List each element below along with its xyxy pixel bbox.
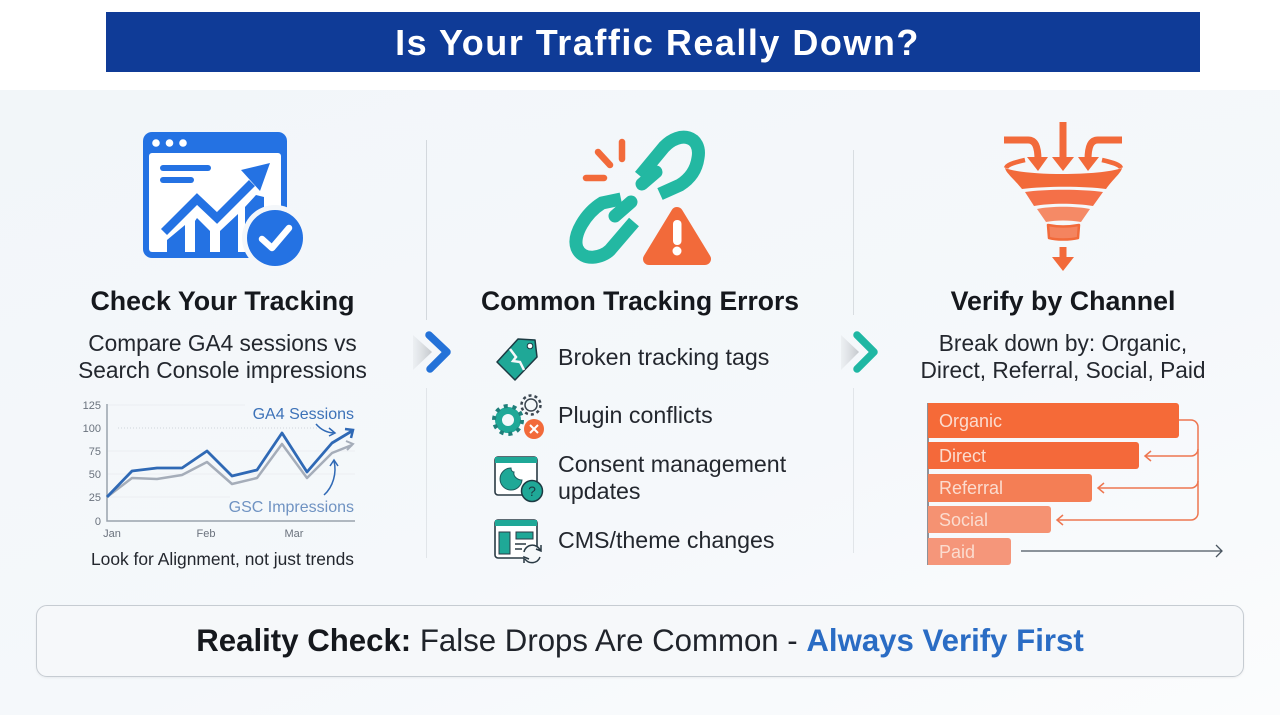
divider: left <box>426 140 427 320</box>
bar: organic: Organic <box>939 411 1002 431</box>
heading: verify by channel: Verify by Channel <box>951 286 1175 316</box>
text: CMS theme changes: CMS/theme changes <box>558 527 775 553</box>
line chart: GA4 sessions vs GSC impressions: GA4 Sessions <box>253 406 354 423</box>
text: consent management updates: updates <box>558 478 641 504</box>
bar: paid: Paid <box>939 542 975 562</box>
text: compare description <box>78 330 367 383</box>
text: consent management updates: Consent management <box>558 451 786 477</box>
bar: referral <box>928 474 1092 502</box>
line chart: GA4 sessions vs GSC impressions: GSC Impressions <box>229 499 354 516</box>
connector arrows <box>1057 420 1198 525</box>
line chart: GA4 sessions vs GSC impressions: Mar <box>285 528 304 540</box>
bar: direct: Direct <box>939 446 986 466</box>
arrow: paid <box>1021 545 1222 557</box>
list: tracking errors <box>492 338 786 564</box>
heading: check your tracking: Check Your Tracking <box>90 286 355 316</box>
line chart: GA4 sessions vs GSC impressions: 125 <box>83 400 101 412</box>
panel: common tracking errors <box>481 130 799 564</box>
text: break down description: Break down by: Organic, <box>939 330 1187 356</box>
text: consent management updates <box>558 451 786 504</box>
text: compare description: Compare GA4 sessions vs <box>88 330 357 356</box>
line chart: GA4 sessions vs GSC impressions: 50 <box>89 469 101 481</box>
icon: cookie consent window: ? <box>528 483 536 499</box>
text: chart caption: Look for Alignment, not just trends <box>91 549 354 569</box>
line chart: GA4 sessions vs GSC impressions: 75 <box>89 446 101 458</box>
heading: common tracking errors: Common Tracking Errors <box>481 286 799 316</box>
bar: paid <box>928 538 1011 565</box>
text: plugin conflicts: Plugin conflicts <box>558 402 713 428</box>
callout: reality check <box>36 605 1244 677</box>
divider: left lower <box>426 388 427 558</box>
divider: right <box>853 150 854 315</box>
line chart: GA4 sessions vs GSC impressions: 100 <box>83 423 101 435</box>
text: broken tags: Broken tracking tags <box>558 344 769 370</box>
callout: reality check: Reality Check: False Drops Are Common - Always Verify First <box>196 623 1084 658</box>
title banner <box>106 12 1200 72</box>
text: break down description: Direct, Referral, Social, Paid <box>921 357 1205 383</box>
line chart: GA4 sessions vs GSC impressions: 25 <box>89 492 101 504</box>
panel: verify by channel <box>921 122 1223 565</box>
bar: social <box>928 506 1051 533</box>
line chart: GA4 sessions vs GSC impressions: Jan <box>103 528 121 540</box>
panel: check your tracking <box>78 132 367 569</box>
divider: right lower <box>853 388 854 553</box>
line chart: GA4 sessions vs GSC impressions: 0 <box>95 516 101 528</box>
line chart: GA4 sessions vs GSC impressions: Feb <box>197 528 215 540</box>
bar: social: Social <box>939 510 988 530</box>
bar: direct <box>928 442 1139 469</box>
bar: organic <box>928 403 1179 438</box>
text: compare description: Search Console impressions <box>78 357 367 383</box>
bar: referral: Referral <box>939 478 1003 498</box>
text: break down description <box>921 330 1205 383</box>
title banner: Is Your Traffic Really Down? <box>395 22 920 63</box>
